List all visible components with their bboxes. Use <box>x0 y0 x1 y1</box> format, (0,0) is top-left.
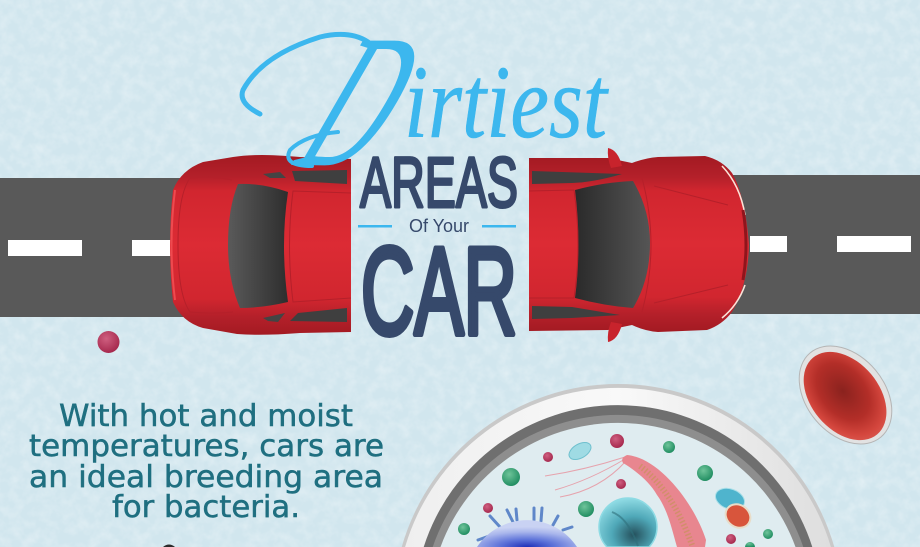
title: Of Your with rules: Of Your <box>409 216 469 236</box>
body text: for bacteria. <box>112 490 300 525</box>
blue virus <box>477 508 577 547</box>
car: left half <box>170 155 351 335</box>
icon: small crimson microbe <box>98 331 120 353</box>
road: right section <box>725 175 920 314</box>
title: CAR: CAR <box>361 223 517 361</box>
car: right half <box>529 148 749 342</box>
body text: With hot and moist <box>59 399 353 434</box>
crimson microbes <box>483 434 736 544</box>
road: left section <box>0 178 190 317</box>
teal round cell <box>599 498 657 547</box>
icon: red blood cell <box>780 328 911 462</box>
green microbes <box>458 441 773 547</box>
title: Dirtiest <box>242 0 609 207</box>
teal and red cells <box>712 484 748 514</box>
pink bacterium <box>545 455 706 547</box>
body text <box>29 399 384 525</box>
title: AREAS: AREAS <box>360 144 518 223</box>
title: Dirtiest: irtiest <box>404 45 609 160</box>
body text: temperatures, cars are <box>29 429 384 464</box>
small teal cell <box>566 439 594 463</box>
title: Dirtiest: D <box>264 0 462 207</box>
body text: an ideal breeding area <box>29 460 383 495</box>
cropped dark element at bottom edge <box>163 544 175 547</box>
petri dish with microbes <box>402 384 834 547</box>
